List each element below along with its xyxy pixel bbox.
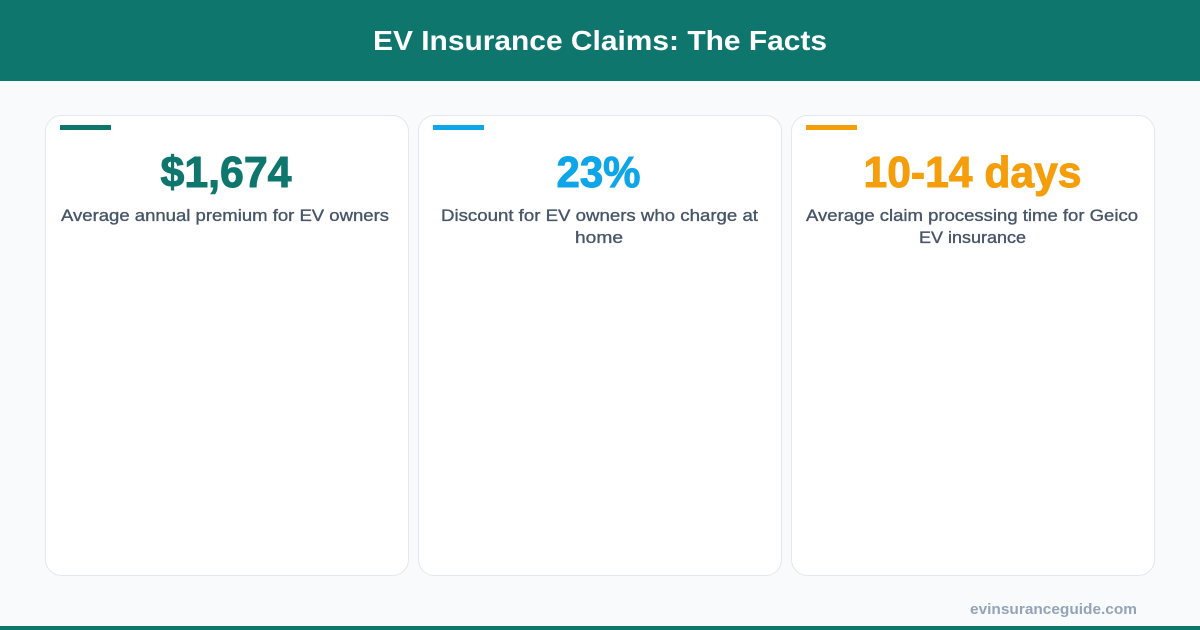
description: home charging discount: Discount for EV owners who charge at — [441, 206, 758, 225]
title: EV Insurance Claims: The Facts — [373, 25, 827, 56]
footer source: evinsuranceguide.com — [970, 601, 1137, 618]
stat: 23%: 23% — [556, 148, 640, 197]
description: claim processing time — [806, 206, 1138, 247]
description: annual premium: Average annual premium for EV owners — [61, 206, 389, 225]
stat: $1,674: $1,674 — [160, 148, 292, 197]
description: home charging discount — [441, 206, 758, 247]
accent bar: amber — [806, 125, 857, 130]
accent bar: teal — [60, 125, 111, 130]
panel: home charging discount — [418, 116, 782, 576]
panel: annual premium — [46, 116, 408, 576]
description: claim processing time: EV insurance — [919, 228, 1026, 247]
accent bar: blue — [433, 125, 484, 130]
header banner — [0, 0, 1200, 81]
description: home charging discount: home — [575, 228, 623, 247]
bottom bar — [0, 626, 1200, 630]
stat: 10-14 days: 10-14 days — [864, 148, 1082, 197]
panel: claim processing time — [792, 116, 1154, 576]
description: claim processing time: Average claim processing time for Geico — [806, 206, 1138, 225]
